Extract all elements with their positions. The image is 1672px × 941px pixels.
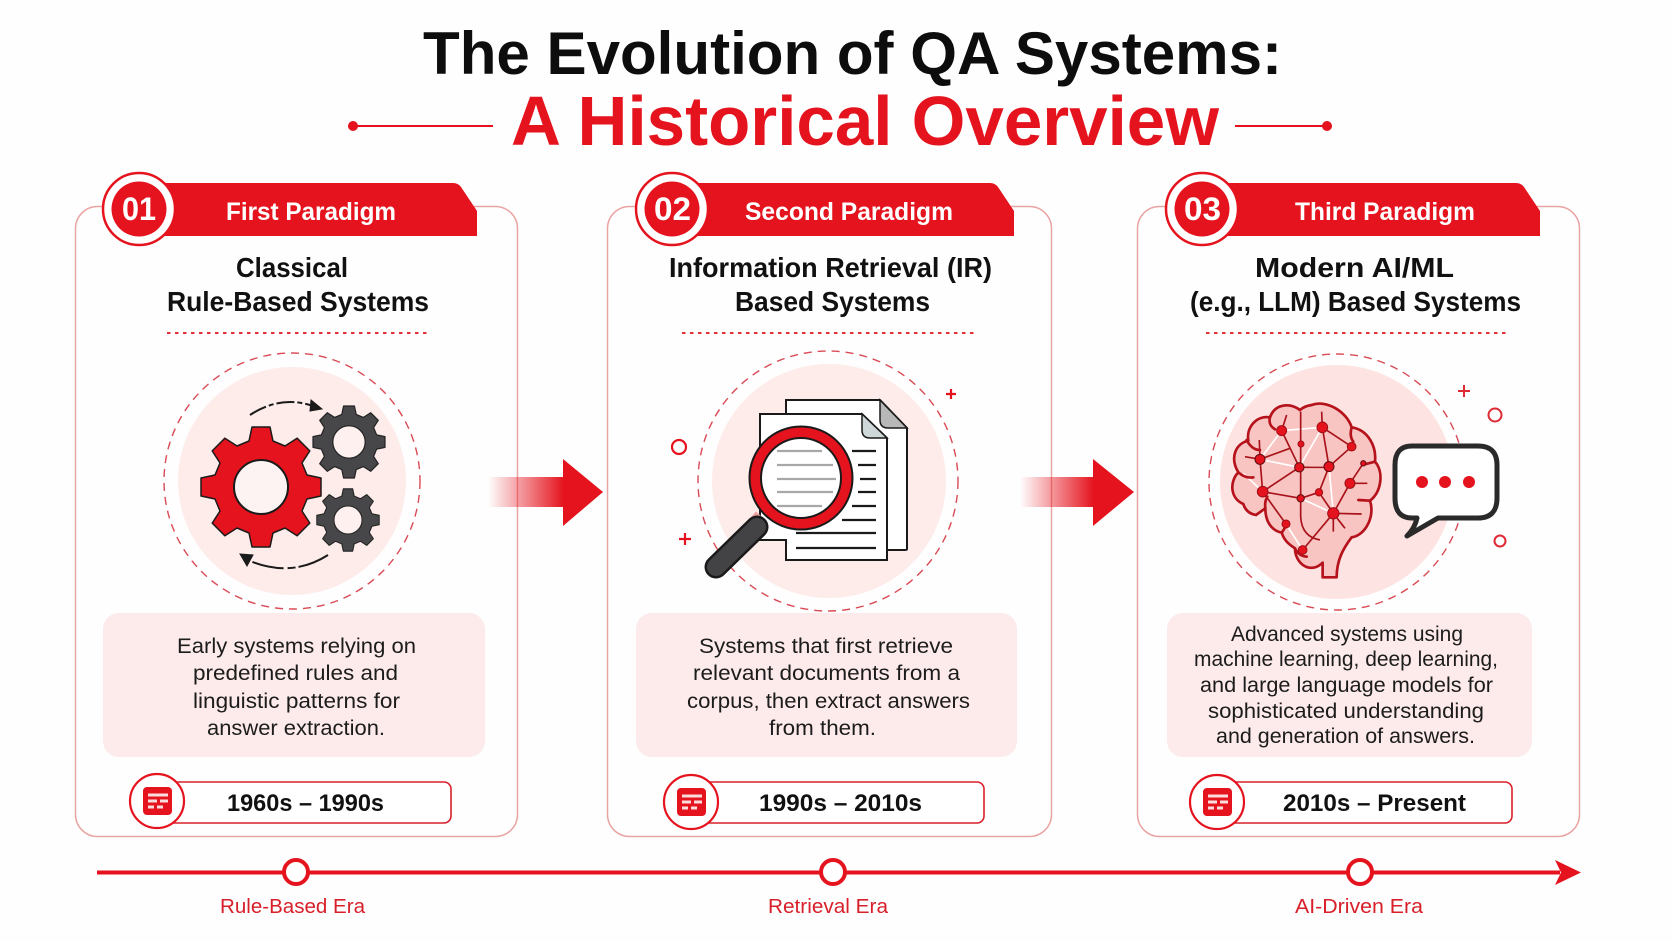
description box: Early systems relying on xyxy=(177,635,416,658)
ribbon xyxy=(672,183,1014,236)
description box: corpus, then extract answers xyxy=(687,690,970,713)
number badge: 02 xyxy=(654,191,691,227)
icon: documents and magnifier xyxy=(672,351,958,611)
description box: answer extraction. xyxy=(207,717,385,740)
heading xyxy=(669,252,992,317)
ribbon: Third Paradigm xyxy=(1295,198,1475,226)
arrow: second to third xyxy=(1020,459,1134,526)
description box: relevant documents from a xyxy=(693,662,960,685)
panel: second paradigm xyxy=(608,173,1052,836)
number badge: 03 xyxy=(1184,191,1221,227)
heading: Based Systems xyxy=(735,286,930,317)
panel: third paradigm xyxy=(1138,173,1580,836)
ribbon: First Paradigm xyxy=(226,198,396,226)
title: The Evolution of QA Systems: xyxy=(423,20,1282,87)
card border xyxy=(76,206,518,836)
heading: Classical xyxy=(236,252,348,283)
date pill: 1990s – 2010s xyxy=(759,790,922,817)
subtitle left rule xyxy=(348,121,493,131)
description box: machine learning, deep learning, xyxy=(1194,648,1498,671)
icon: calendar xyxy=(143,787,172,815)
heading xyxy=(167,252,429,317)
description box: Advanced systems using xyxy=(1231,623,1463,646)
number badge xyxy=(103,173,175,245)
title xyxy=(348,20,1332,160)
node: rule-based era: Rule-Based Era xyxy=(220,896,366,918)
decorative marks xyxy=(672,389,956,545)
card border xyxy=(608,206,1052,836)
node: retrieval era xyxy=(768,860,889,918)
grey gear top xyxy=(313,406,385,478)
description box xyxy=(103,613,485,757)
rotation arrow bottom xyxy=(240,554,328,568)
timeline xyxy=(97,860,1581,918)
number badge xyxy=(636,173,708,245)
front document xyxy=(760,414,887,560)
date pill xyxy=(130,774,451,828)
back document xyxy=(786,400,907,550)
date pill: 1960s – 1990s xyxy=(227,790,384,817)
rotation arrow top xyxy=(250,400,322,415)
description box: from them. xyxy=(769,717,876,740)
description box: and generation of answers. xyxy=(1216,725,1475,748)
panel: first paradigm xyxy=(76,173,518,836)
node: ai-driven era: AI-Driven Era xyxy=(1295,896,1424,918)
document lines xyxy=(796,451,876,548)
heading: Modern AI/ML xyxy=(1255,252,1454,283)
node: ai-driven era xyxy=(1295,860,1424,918)
heading xyxy=(1190,252,1521,317)
ribbon xyxy=(139,183,477,236)
grey gear bottom xyxy=(317,489,379,551)
date pill: 2010s – Present xyxy=(1283,790,1466,817)
description box xyxy=(1167,613,1532,757)
card border xyxy=(1138,206,1580,836)
description box: and large language models for xyxy=(1200,674,1493,697)
date pill xyxy=(1190,775,1512,829)
magnifier handle xyxy=(716,516,763,567)
subtitle right rule xyxy=(1235,121,1332,131)
heading: Rule-Based Systems xyxy=(167,286,429,317)
description box xyxy=(636,613,1017,757)
heading: Information Retrieval (IR) xyxy=(669,252,992,283)
brain xyxy=(1232,404,1380,577)
number badge xyxy=(1166,173,1238,245)
ribbon xyxy=(1202,183,1540,236)
icon: brain and chat bubble xyxy=(1209,354,1506,610)
date pill xyxy=(664,775,984,829)
decorative marks xyxy=(1458,385,1506,546)
timeline arrowhead xyxy=(1555,860,1581,885)
heading: (e.g., LLM) Based Systems xyxy=(1190,286,1521,317)
chat bubble xyxy=(1395,446,1497,536)
description box: predefined rules and xyxy=(193,662,398,685)
node: retrieval era: Retrieval Era xyxy=(768,896,889,918)
magnifier lens xyxy=(750,426,852,530)
icon: calendar xyxy=(1203,788,1232,816)
number badge: 01 xyxy=(122,191,156,227)
subtitle: A Historical Overview xyxy=(511,82,1220,160)
arrow: first to second xyxy=(488,459,603,526)
description box: Systems that first retrieve xyxy=(699,635,953,658)
description box: linguistic patterns for xyxy=(193,690,400,713)
icon: gears xyxy=(164,353,420,609)
icon: calendar xyxy=(677,788,706,816)
ribbon: Second Paradigm xyxy=(745,198,953,226)
description box: sophisticated understanding xyxy=(1208,700,1484,723)
node: rule-based era xyxy=(220,860,366,918)
big red gear xyxy=(201,427,321,547)
